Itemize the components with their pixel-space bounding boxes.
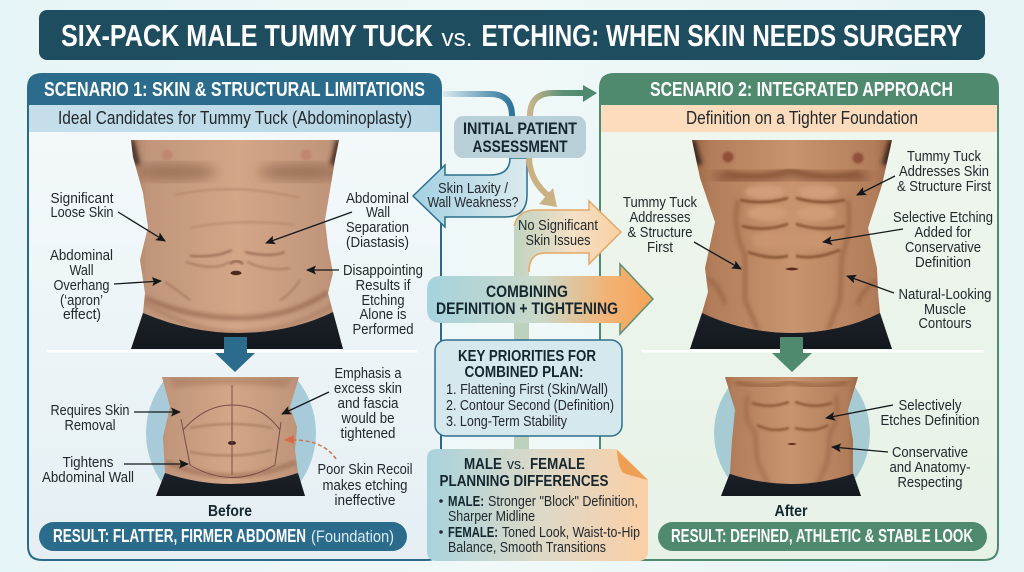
photo: large before torso (131, 140, 343, 349)
male vs female heading (440, 456, 609, 490)
label: conservative and anatomy-respecting (832, 444, 970, 491)
label: tummy tuck addresses skin: & Structure First (897, 178, 992, 195)
label: tightens abdominal wall (42, 454, 188, 486)
label: disappointing results: Alone is (360, 306, 406, 323)
initial patient assessment box (454, 116, 586, 158)
label: conservative and anatomy-respecting: and Anatomy- (890, 459, 970, 476)
label: abdominal wall separation: Wall (366, 204, 390, 221)
box: key priorities: 1. Flattening First (Skin/Wall) (446, 381, 608, 398)
scenario 2 subheader (601, 105, 997, 132)
arrow: scenario 1 down (215, 337, 255, 372)
arrow: skin laxity: Skin Laxity / (438, 180, 509, 197)
label: selective etching: Selective Etching (893, 209, 993, 226)
scenario 2 header (600, 74, 998, 105)
title bar: SIX-PACK MALE TUMMY TUCK (61, 18, 433, 53)
label: selective etching: Definition (915, 254, 971, 271)
label: abdominal wall overhang: Abdominal (50, 247, 113, 264)
label: conservative and anatomy-respecting: Conservative (892, 444, 968, 461)
label: significant loose skin: Significant (50, 190, 114, 207)
label: abdominal wall overhang: Overhang (54, 277, 110, 294)
label: significant loose skin: Loose Skin (50, 204, 114, 221)
result pill: scenario 1 (39, 522, 407, 551)
box: key priorities: KEY PRIORITIES FOR (458, 348, 596, 365)
initial patient assessment box: INITIAL PATIENT (463, 119, 578, 138)
label: poor skin recoil (285, 440, 412, 509)
label: tummy tuck addresses skin: Addresses Skin (899, 163, 989, 180)
box: male vs female planning differences: Stronger "Block" Definition, (488, 493, 638, 510)
photo: before torso with surgical markings (146, 377, 316, 496)
label: tummy tuck addresses skin (857, 148, 992, 195)
label: abdominal wall overhang: effect) (63, 306, 101, 323)
label: abdominal wall overhang (50, 247, 161, 323)
label: abdominal wall separation: (Diastasis) (346, 234, 409, 251)
label: selective etching (823, 209, 993, 271)
arrow: to no significant skin issues (529, 158, 557, 207)
label: selectively etches definition: Selectively (898, 397, 962, 414)
label: disappointing results (307, 262, 423, 338)
label: natural-looking muscle contours (847, 276, 992, 332)
arrow: no significant skin issues (514, 201, 621, 345)
label: natural-looking muscle contours: Natural-Looking (898, 286, 992, 303)
label: emphasis on excess skin and fascia: and fascia (338, 395, 399, 412)
scenario 2 subheader: Definition on a Tighter Foundation (686, 108, 918, 128)
male vs female heading: vs. (507, 456, 525, 473)
box: male vs female planning differences: MALE: (448, 493, 484, 510)
male vs female heading: MALE (464, 456, 502, 473)
label: emphasis on excess skin and fascia: excess skin (334, 380, 402, 397)
connector: vertical stem (514, 323, 529, 453)
box: male vs female planning differences: Balance, Smooth Transitions (448, 539, 606, 556)
label: abdominal wall overhang: (‘apron’ (60, 292, 103, 309)
box: male vs female planning differences: FEMALE: (448, 524, 498, 541)
scenario 2 header: SCENARIO 2: INTEGRATED APPROACH (650, 79, 953, 101)
label: natural-looking muscle contours: Contours (918, 315, 972, 332)
photo: small after torso (714, 377, 870, 496)
label: abdominal wall separation: Separation (346, 219, 409, 236)
label: poor skin recoil: Poor Skin Recoil (318, 461, 412, 478)
arrow: skin laxity: Wall Weakness? (428, 194, 518, 211)
label: requires skin removal: Removal (64, 417, 116, 434)
result pill: scenario 1: (Foundation) (311, 527, 394, 546)
scenario 1 subheader (29, 105, 440, 132)
box: male vs female planning differences (427, 449, 648, 561)
photo: large after torso (690, 140, 892, 349)
label: selectively etches definition: Etches Definition (880, 412, 980, 429)
label: requires skin removal: Requires Skin (50, 402, 130, 419)
scenario 1 header: SCENARIO 1: SKIN & STRUCTURAL LIMITATIONS (44, 79, 425, 101)
label: emphasis on excess skin and fascia (282, 365, 402, 442)
label: selectively etches definition (826, 397, 980, 429)
box: key priorities (435, 340, 622, 436)
arrow: to scenario 2 (530, 85, 597, 116)
label: selective etching: Conservative (905, 239, 981, 256)
initial patient assessment box: ASSESSMENT (472, 137, 568, 156)
label: disappointing results: Results if (356, 277, 411, 294)
label: selective etching: Added for (914, 224, 972, 241)
male vs female heading: PLANNING DIFFERENCES (440, 473, 609, 490)
arrow: no significant skin issues: No Significant (518, 217, 599, 234)
label: tightens abdominal wall: Tightens (62, 454, 114, 471)
label: before: Before (208, 503, 252, 520)
label: natural-looking muscle contours: Muscle (924, 301, 966, 318)
label: abdominal wall separation: Abdominal (346, 190, 409, 207)
label: emphasis on excess skin and fascia: would be (341, 410, 394, 427)
label: tummy tuck addresses structure: & Structure (628, 224, 692, 241)
label: disappointing results: Disappointing (343, 262, 423, 279)
connector: to scenario 1 (443, 94, 512, 116)
box: male vs female planning differences: Sharper Midline (448, 508, 535, 525)
arrow: combining definition and tightening: COMBINING (486, 282, 568, 301)
label: tummy tuck addresses structure: First (647, 239, 674, 256)
label: abdominal wall separation (266, 190, 409, 251)
panel: scenario 2 (600, 74, 998, 560)
label: significant loose skin (50, 190, 165, 241)
result pill: scenario 2 (658, 522, 987, 551)
label: after: After (774, 503, 808, 520)
label: tummy tuck addresses structure (623, 194, 741, 269)
label: emphasis on excess skin and fascia: Emphasis a (334, 365, 402, 382)
arrow: combining definition and tightening (427, 264, 653, 334)
scenario 1 subheader: Ideal Candidates for Tummy Tuck (Abdominoplasty) (58, 108, 412, 128)
label: requires skin removal (50, 402, 180, 434)
title bar: vs. (442, 25, 472, 52)
label: tummy tuck addresses skin: Tummy Tuck (907, 148, 981, 165)
label: tummy tuck addresses structure: Addresses (630, 209, 690, 226)
label: emphasis on excess skin and fascia: tightened (340, 425, 396, 442)
arrow: scenario 2 down (772, 337, 812, 372)
label: disappointing results: Etching (362, 292, 404, 309)
scenario 1 header (28, 74, 441, 105)
label: poor skin recoil: makes etching (322, 477, 408, 494)
arrow: combining definition and tightening: DEFINITION + TIGHTENING (436, 299, 618, 318)
box: key priorities: COMBINED PLAN: (464, 364, 584, 381)
folded corner (617, 450, 648, 480)
box: key priorities: 3. Long-Term Stability (446, 413, 567, 430)
male vs female heading: FEMALE (530, 456, 585, 473)
panel: scenario 1 (28, 74, 441, 560)
result pill: scenario 1: RESULT: FLATTER, FIRMER ABDOMEN (53, 526, 306, 546)
box: key priorities: 2. Contour Second (Definition) (446, 397, 614, 414)
label: abdominal wall overhang: Wall (70, 262, 94, 279)
label: conservative and anatomy-respecting: Respecting (898, 474, 962, 491)
box: male vs female planning differences: Toned Look, Waist-to-Hip (502, 524, 640, 541)
title bar (39, 10, 985, 60)
arrow: skin laxity (413, 158, 527, 227)
arrow: no significant skin issues: Skin Issues (526, 232, 590, 249)
label: tummy tuck addresses structure: Tummy Tuck (623, 194, 697, 211)
label: tightens abdominal wall: Abdominal Wall (42, 469, 134, 486)
label: disappointing results: Performed (352, 321, 414, 338)
label: poor skin recoil: ineffective (334, 492, 396, 509)
centre flow: decision flowchart (413, 85, 653, 561)
